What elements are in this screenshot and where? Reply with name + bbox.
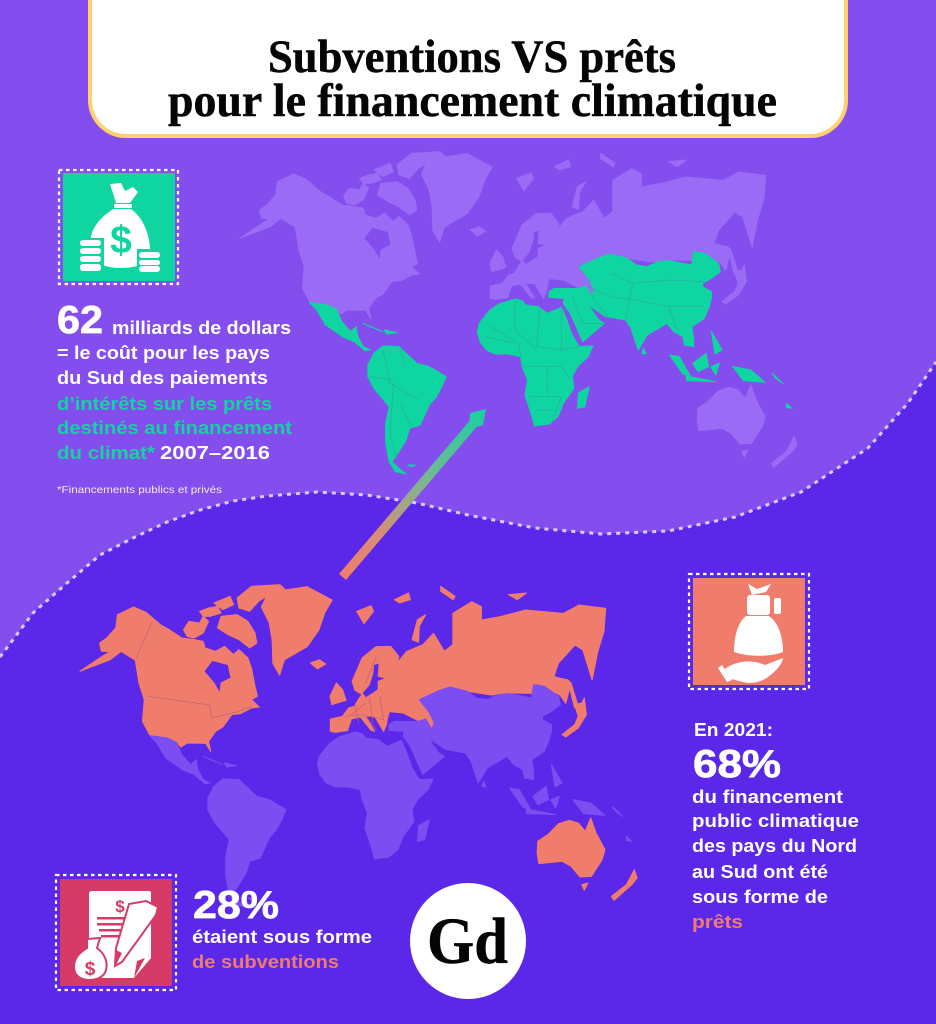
arrow from North to South xyxy=(339,409,486,580)
footnote: *Financements publics et privés xyxy=(57,484,222,496)
northern countries xyxy=(240,152,797,467)
southern country borders xyxy=(369,273,704,460)
text block: En 2021 68%: public climatique xyxy=(692,810,859,831)
northern country borders xyxy=(136,622,384,730)
text block: 62 milliards xyxy=(57,299,292,463)
text block: 62 milliards: = le coût pour les pays xyxy=(57,342,270,363)
text block: 28% xyxy=(192,884,372,972)
title panel xyxy=(90,0,846,136)
text block: 28%: étaient sous forme xyxy=(192,926,372,947)
text block: 62 milliards: du Sud des paiements xyxy=(57,367,268,388)
southern countries xyxy=(150,685,632,907)
heading: Subventions VS prêts xyxy=(268,31,676,83)
icon: money bag above a hand xyxy=(689,574,809,689)
background: lower zone with wave xyxy=(0,362,936,1024)
dotted wave line xyxy=(0,362,936,657)
text block: En 2021 68%: sous forme de xyxy=(692,886,828,907)
title panel: pour le financement climatique xyxy=(168,75,777,127)
text block: 62 milliards: du climat* xyxy=(57,442,156,463)
text block: 62 milliards: d’intérêts sur les prêts xyxy=(57,393,272,414)
icon: document, pen and money bag: $ xyxy=(85,959,96,980)
text block: 28%: de subventions xyxy=(192,951,339,972)
text block: En 2021 68%: En 2021: xyxy=(694,720,773,740)
text block: 62 milliards: destinés au financement xyxy=(57,417,292,438)
text block: En 2021 68%: des pays du Nord xyxy=(692,835,857,856)
panel box xyxy=(90,0,846,136)
world map: South in green xyxy=(240,152,797,474)
logo: Gd: Gd xyxy=(427,905,508,978)
icon: money bag with coins xyxy=(59,170,178,284)
text block: 62 milliards: 62 xyxy=(57,299,103,342)
text block: 62 milliards: milliards de dollars xyxy=(112,317,291,338)
text block: 28%: 28% xyxy=(193,884,279,927)
text block: En 2021 68% xyxy=(692,720,859,932)
text block: En 2021 68%: du financement xyxy=(692,786,843,807)
logo: Gd xyxy=(410,883,526,999)
text block: En 2021 68%: 68% xyxy=(693,743,781,786)
text block: 62 milliards: 2007–2016 xyxy=(160,442,270,463)
icon: document, pen and money bag xyxy=(56,875,176,990)
world map: North in orange xyxy=(80,585,637,907)
text block: En 2021 68%: au Sud ont été xyxy=(692,861,828,882)
icon: document, pen and money bag: $ xyxy=(115,897,125,916)
northern countries xyxy=(80,585,637,900)
icon: money bag with coins: $ xyxy=(110,219,132,262)
text block: En 2021 68%: prêts xyxy=(692,911,743,932)
southern countries xyxy=(310,252,792,474)
